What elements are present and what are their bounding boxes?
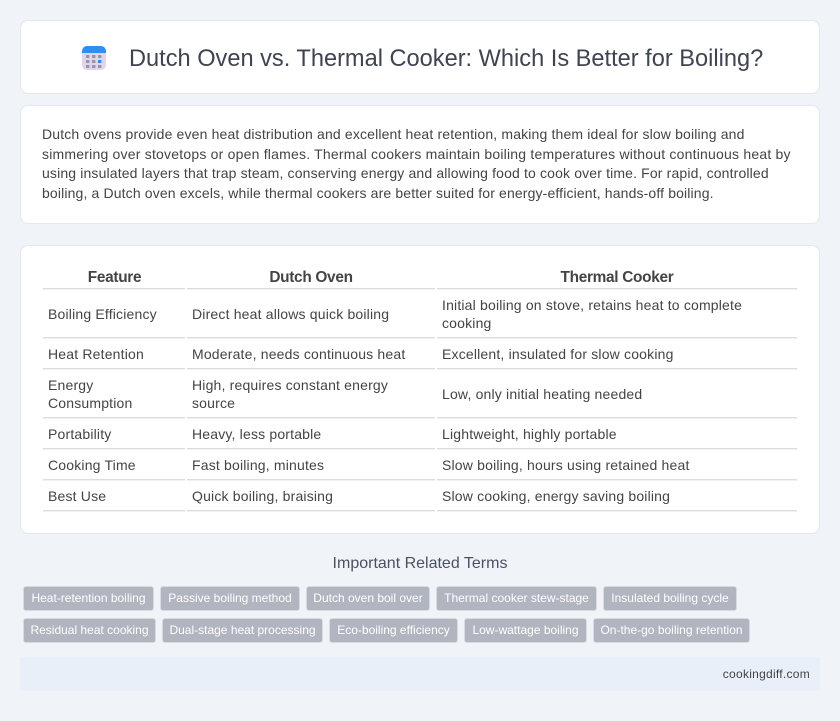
row: portability bbox=[43, 426, 797, 450]
related term tags: Insulated boiling cycle bbox=[611, 591, 729, 605]
row: heat retention: Excellent, insulated for slow cooking bbox=[442, 346, 674, 362]
related term tags: On-the-go boiling retention bbox=[600, 623, 743, 637]
table header bbox=[43, 269, 797, 290]
row: boiling efficiency: cooking bbox=[442, 315, 492, 331]
summary text: boiling, a Dutch oven excels, while thermal cookers are better suited for energy-efficient, hands-off boiling. bbox=[42, 185, 714, 201]
row: heat retention: Heat Retention bbox=[48, 346, 144, 362]
row: energy consumption bbox=[43, 377, 797, 419]
row: heat retention: Moderate, needs continuous heat bbox=[192, 346, 405, 362]
related term tags: Low-wattage boiling bbox=[472, 623, 579, 637]
related term tags bbox=[23, 586, 750, 643]
row: portability: Portability bbox=[48, 426, 111, 442]
panel: summary paragraph bbox=[20, 105, 820, 224]
summary text: Dutch ovens provide even heat distribution and excellent heat retention, making them ideal for slow boiling and bbox=[42, 126, 745, 142]
row: boiling efficiency: Boiling Efficiency bbox=[48, 306, 157, 322]
row: best use bbox=[43, 488, 797, 512]
table header: Feature bbox=[88, 269, 141, 286]
row: cooking time: Slow boiling, hours using retained heat bbox=[442, 457, 690, 473]
row: cooking time: Cooking Time bbox=[48, 457, 136, 473]
row: boiling efficiency: Initial boiling on stove, retains heat to complete bbox=[442, 297, 742, 313]
footer source text: cookingdiff.com bbox=[723, 667, 810, 681]
related term tags: Dual-stage heat processing bbox=[169, 623, 316, 637]
row: energy consumption: Low, only initial heating needed bbox=[442, 386, 642, 402]
row: boiling efficiency bbox=[43, 297, 797, 339]
row: energy consumption: Energy bbox=[48, 377, 93, 393]
row: energy consumption: Consumption bbox=[48, 395, 132, 411]
summary text bbox=[42, 126, 791, 201]
row: best use: Slow cooking, energy saving boiling bbox=[442, 488, 670, 504]
related term tags: Thermal cooker stew-stage bbox=[444, 591, 589, 605]
related term tags: Eco-boiling efficiency bbox=[337, 623, 450, 637]
row: boiling efficiency: Direct heat allows quick boiling bbox=[192, 306, 389, 322]
panel: title header bbox=[20, 20, 820, 94]
row: best use: Best Use bbox=[48, 488, 106, 504]
panel: comparison table bbox=[20, 245, 820, 534]
row: portability: Lightweight, highly portable bbox=[442, 426, 617, 442]
row: energy consumption: source bbox=[192, 395, 235, 411]
table header: Thermal Cooker bbox=[560, 269, 673, 286]
row: cooking time: Fast boiling, minutes bbox=[192, 457, 324, 473]
title: Dutch Oven vs. Thermal Cooker: Which Is Better for Boiling? bbox=[129, 46, 763, 72]
row: portability: Heavy, less portable bbox=[192, 426, 321, 442]
row: cooking time bbox=[43, 457, 797, 481]
related term tags: Dutch oven boil over bbox=[313, 591, 423, 605]
row: energy consumption: High, requires constant energy bbox=[192, 377, 388, 393]
table header: Dutch Oven bbox=[269, 269, 353, 286]
related term tags: Residual heat cooking bbox=[30, 623, 149, 637]
related term tags: Passive boiling method bbox=[168, 591, 292, 605]
summary text: using insulated layers that trap steam, conserving energy and allowing food to cook over time. For rapid, controlled bbox=[42, 165, 769, 181]
related term tags: Heat-retention boiling bbox=[31, 591, 146, 605]
heading: related terms: Important Related Terms bbox=[333, 555, 507, 572]
row: heat retention bbox=[43, 346, 797, 370]
footer bar bbox=[20, 657, 820, 691]
row: best use: Quick boiling, braising bbox=[192, 488, 333, 504]
icon: calendar bbox=[82, 46, 106, 70]
summary text: simmering over stovetops or open flames. Thermal cookers maintain boiling temperatures without continuous heat by bbox=[42, 146, 791, 162]
